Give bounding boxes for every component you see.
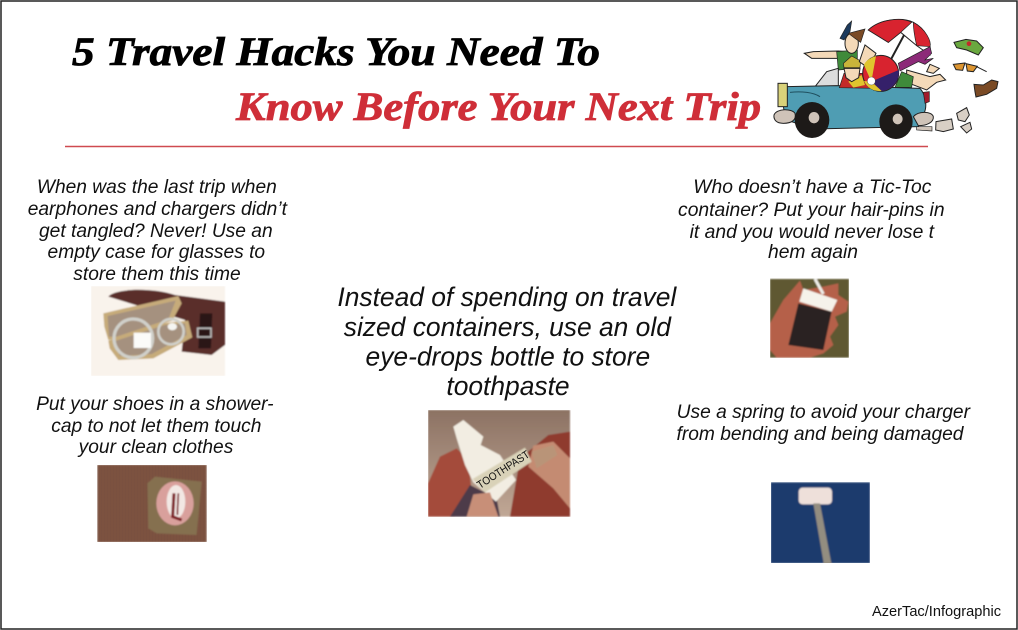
text: shoes tip: your clean clothes (77, 437, 234, 458)
text: centre tip: toothpaste (446, 371, 570, 401)
text: spring tip: Use a spring to avoid your charger (677, 402, 972, 423)
title (72, 29, 761, 129)
sunglasses (953, 63, 987, 72)
text: tangled chargers tip: store them this time (73, 264, 241, 285)
photo: eye-drop bottle labelled toothpaste (428, 410, 570, 517)
hat (954, 39, 983, 55)
text: tic-tac tip: Who doesn’t have a Tic-Toc (693, 177, 932, 198)
text: centre tip: sized containers, use an old (344, 312, 672, 342)
divider line (65, 146, 928, 148)
text: tangled chargers tip: When was the last trip when (37, 177, 277, 198)
photo: glasses case with cables (91, 286, 225, 376)
beach ball (863, 55, 899, 91)
photo: hairpins in tic-tac container (770, 279, 849, 358)
title line 1: 5 Travel Hacks You Need To (72, 29, 600, 74)
exhaust puffs (936, 108, 972, 133)
text: tic-tac tip: container? Put your hair-pins in (678, 200, 945, 221)
text: tangled chargers tip: empty case for glasses to (48, 242, 265, 263)
text: spring tip: from bending and being damaged (677, 424, 965, 445)
legs (895, 64, 946, 90)
umbrella (868, 19, 933, 71)
text: tic-tac tip: hem again (768, 242, 858, 263)
title line 2: Know Before Your Next Trip (235, 84, 761, 129)
photo: charger cable with spring (771, 482, 870, 565)
text: centre tip: eye-drops bottle to store (366, 342, 650, 372)
label text on bottle: TOOTHPAST (475, 449, 532, 492)
icon: cartoon car with travellers (774, 19, 998, 139)
child in car (839, 45, 876, 88)
credit: AzerTac/Infographic (872, 604, 1001, 620)
text: tangled chargers tip: earphones and chargers didn’t (28, 199, 288, 220)
text: tic-tac tip: it and you would never lose t (690, 222, 936, 243)
car body (774, 68, 933, 139)
text: shoes tip: cap to not let them touch (51, 416, 261, 437)
photo: shoes in shower cap (97, 465, 207, 542)
text: shoes tip: Put your shoes in a shower- (36, 394, 274, 415)
shoe (974, 80, 998, 97)
text: centre tip: Instead of spending on travel (337, 282, 677, 312)
text: tangled chargers tip: get tangled? Never! Use an (39, 221, 273, 242)
man pointing (804, 21, 865, 70)
